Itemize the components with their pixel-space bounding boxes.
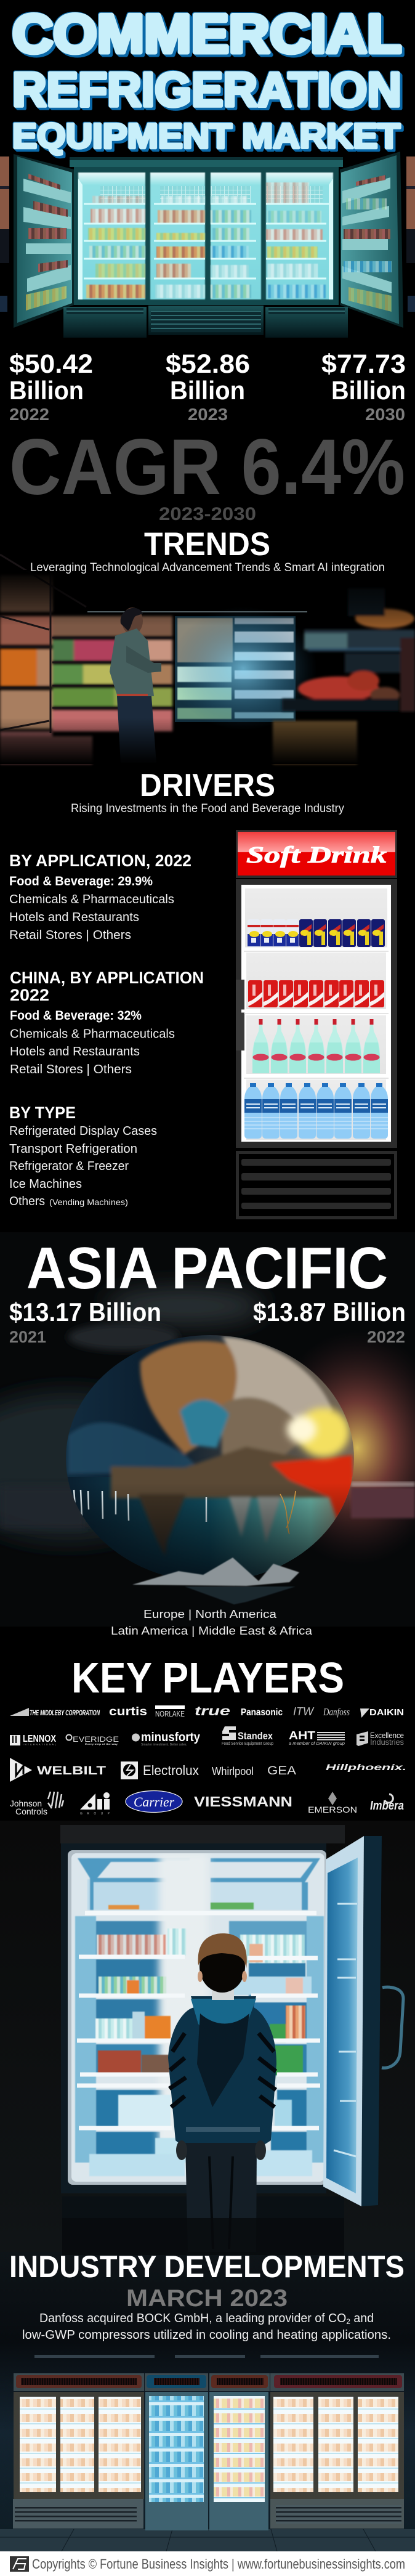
side windows [0, 156, 415, 312]
title [12, 3, 401, 156]
right shelf and produce [273, 588, 415, 764]
logo: Minusforty [132, 1731, 201, 1747]
development description [22, 2312, 391, 2342]
stat: 2030 market size: $77.73 [321, 349, 406, 379]
illustration: row of display refrigerators [0, 2218, 415, 2551]
title: EQUIPMENT MARKET [12, 116, 400, 156]
heading: drivers: DRIVERS [140, 768, 275, 803]
stat: 2030 market size: Billion [331, 376, 406, 405]
logo: AHT: a member of DAIKIN group [289, 1742, 345, 1746]
logo: Middleby: THE MIDDLEBY CORPORATION [30, 1709, 100, 1717]
bottom of fridge above [62, 2218, 344, 2255]
list: china by application 2022: Chemicals & Pharmaceuticals [10, 1028, 175, 1041]
logo: Minusforty: minusforty [141, 1731, 201, 1744]
logo: Electrolux: Electrolux [143, 1763, 199, 1778]
heading: trends: Leveraging Technological Advancement Trends & Smart AI integration [30, 561, 385, 574]
heading: key players: KEY PLAYERS [71, 1654, 344, 1702]
boy [168, 1933, 276, 2252]
right group of doors [270, 2392, 404, 2529]
logo: Carrier: Carrier [134, 1794, 174, 1810]
sky and sea backdrop [0, 1232, 415, 1627]
logo: Danfoss: Danfoss [323, 1706, 350, 1718]
illustration: globe half frozen half burning [0, 1232, 415, 1627]
stat: 2030 market size: 2030 [365, 405, 405, 424]
logo: Emerson: EMERSON [308, 1805, 357, 1814]
logo: Curtis: curtis [109, 1705, 147, 1718]
logo: GEA: GEA [267, 1765, 296, 1778]
illustration: boy looking into a refrigerator [0, 1821, 415, 2252]
logo: Imbera: Imbera [370, 1799, 404, 1813]
case cabinet [70, 157, 343, 305]
sign [236, 830, 397, 878]
back wall [87, 611, 307, 612]
stat: 2022 market size: Billion [9, 376, 84, 405]
CAGR headline: 2023-2030 [159, 504, 256, 524]
list: china by application 2022 [10, 969, 204, 1076]
row: mint bottles [252, 1019, 380, 1073]
development description: Danfoss acquired BOCK GmbH, a leading provider of CO [39, 2312, 353, 2325]
list: by type [9, 1103, 157, 1208]
middle group of doors [145, 2392, 268, 2530]
logo: Hillphoenix: Hillphoenix. [326, 1762, 406, 1772]
row: energy and lemon cans [248, 919, 385, 947]
logo: Standex: Standex [238, 1730, 273, 1742]
logo: Standex: Food Service Equipment Group [222, 1742, 273, 1746]
stat: asia pacific 2021: 2021 [9, 1328, 46, 1346]
logo: AHT [289, 1729, 345, 1746]
logo: Panasonic: Panasonic [241, 1707, 283, 1718]
list: by type: BY TYPE [9, 1103, 76, 1122]
logo: AHT: AHT [289, 1729, 315, 1742]
shelf rails [0, 555, 172, 733]
logo: Lennox: LENNOX [23, 1734, 56, 1744]
left door [14, 154, 74, 328]
list: by application 2022: Chemicals & Pharmaceuticals [9, 893, 174, 906]
stat: asia pacific 2022 [253, 1298, 406, 1346]
stat: 2022 market size: $50.42 [9, 349, 93, 379]
list: china by application 2022: 2022 [10, 986, 49, 1004]
glass panels [78, 173, 333, 299]
illustration: open refrigerated display case [0, 152, 415, 338]
footer logo [10, 2556, 29, 2572]
logo: Welbilt: WELBILT [37, 1765, 107, 1778]
logo: Ali Group [80, 1792, 110, 1816]
list: china by application 2022: Hotels and Restaurants [10, 1045, 140, 1058]
logo: Standex [222, 1726, 273, 1746]
logo: Carrier [126, 1790, 182, 1813]
logo: Excellence [357, 1731, 404, 1747]
logo: Emerson [308, 1792, 357, 1814]
bottom fade of scene [0, 718, 415, 764]
logo: Everidge [66, 1735, 119, 1745]
stat: 2022 market size [9, 349, 93, 424]
sign: Soft Drink [246, 842, 387, 868]
stat: asia pacific 2021: $13.17 Billion [9, 1298, 161, 1327]
left shelves [0, 575, 172, 764]
heading: asia pacific: ASIA PACIFIC [26, 1235, 388, 1301]
logo: Welbilt [10, 1758, 107, 1782]
refrigerator interior [71, 1853, 324, 2182]
stat: asia pacific 2022: 2022 [367, 1328, 405, 1346]
logo: Johnson Controls: Controls [15, 1806, 47, 1816]
stat: 2022 market size: 2022 [9, 405, 49, 424]
heading: trends: TRENDS [144, 526, 270, 563]
logo: Everidge: Every step of the way [85, 1742, 118, 1745]
logo: Imbera [370, 1794, 404, 1813]
glowing fridge [169, 607, 317, 730]
left group of doors [13, 2392, 144, 2529]
list: by type: Ice Machines [9, 1177, 82, 1191]
logo: Ali Group: GROUP [80, 1812, 110, 1816]
logo: Excellence: Industries [370, 1737, 404, 1747]
logo: Viessmann: VIESSMANN [194, 1794, 292, 1810]
stat: asia pacific 2021 [9, 1298, 161, 1346]
other regions [111, 1608, 313, 1637]
logo: Excellence: Excellence [370, 1731, 404, 1740]
logo: Norlake: NORLAKE [155, 1709, 185, 1718]
company logos [10, 1704, 406, 1816]
list: by application 2022 [9, 851, 191, 942]
list: by application 2022: Food & Beverage: 29.9% [9, 874, 153, 888]
list: by type: Transport Refrigeration [9, 1142, 137, 1156]
logo: Norlake [155, 1705, 185, 1718]
logo: Daikin: DAIKIN [369, 1707, 404, 1718]
footer [0, 2551, 415, 2576]
globe sphere [66, 1335, 355, 1585]
logo: Whirlpool: Whirlpool [212, 1765, 254, 1778]
stat: 2023 market size: 2023 [188, 405, 228, 424]
illustration: shopper in a supermarket [0, 555, 415, 764]
list: by type: Refrigerator & Freezer [9, 1160, 129, 1173]
stat: asia pacific 2022: $13.87 Billion [253, 1298, 406, 1327]
logo: ITW: ITW [293, 1705, 315, 1718]
other regions: Latin America | Middle East & Africa [111, 1625, 313, 1637]
list: by application 2022: Hotels and Restaurants [9, 911, 139, 924]
heading: drivers [71, 768, 344, 815]
base vent [236, 1151, 397, 1219]
list: by application 2022: Retail Stores | Others [9, 928, 131, 942]
illustration: soft drink fridge [236, 830, 397, 1219]
cabinet [236, 879, 397, 1148]
heading: trends [30, 526, 385, 574]
heading: drivers: Rising Investments in the Food and Beverage Industry [71, 802, 344, 815]
open door [323, 1836, 403, 2206]
ceiling lamps [34, 2355, 379, 2358]
logo: Lennox: INTERNATIONAL [23, 1744, 56, 1746]
list: by type: Refrigerated Display Cases [9, 1124, 157, 1138]
logo: Electrolux [121, 1761, 199, 1779]
development description: and [350, 2312, 374, 2325]
logo: Johnson Controls: Johnson [10, 1798, 42, 1808]
date: march 2023: MARCH 2023 [126, 2285, 288, 2312]
stat: 2023 market size [166, 349, 250, 424]
row: water bottles [244, 1083, 388, 1139]
right door [340, 152, 403, 328]
logo: True: true [195, 1704, 230, 1718]
development description: 2 [346, 2317, 350, 2326]
logo: Everidge: EVERIDGE [73, 1735, 119, 1744]
shelved products [84, 182, 329, 298]
title: COMMERCIAL [12, 3, 401, 64]
iceberg [132, 1558, 299, 1604]
list: china by application 2022: CHINA, BY APPLICATION [10, 969, 204, 987]
list: china by application 2022: Retail Stores | Others [10, 1063, 132, 1076]
logo: Johnson Controls [10, 1792, 63, 1816]
list: by type: Others [9, 1195, 45, 1208]
stat: 2030 market size [321, 349, 406, 424]
development description: low-GWP compressors utilized in cooling and heating applications. [22, 2328, 391, 2342]
title: REFRIGERATION [12, 62, 401, 116]
list: by application 2022: BY APPLICATION, 2022 [9, 851, 191, 870]
stat: 2023 market size: Billion [170, 376, 245, 405]
case base grills [63, 306, 348, 338]
stat: 2023 market size: $52.86 [166, 349, 250, 379]
refrigerator body [60, 1825, 345, 2252]
logo: Lennox [10, 1734, 56, 1746]
row: red cola cans [248, 980, 384, 1007]
list: by type: (Vending Machines) [49, 1197, 128, 1207]
logo: Minusforty: Smarter investment. Better sales. [141, 1743, 187, 1747]
man with phone [110, 607, 161, 764]
list: china by application 2022: Food & Beverage: 32% [10, 1009, 142, 1023]
other regions: Europe | North America [143, 1608, 277, 1620]
signage bands [14, 2373, 404, 2391]
logo: Middleby [10, 1708, 100, 1717]
floor [0, 2529, 415, 2551]
top fade of scene [0, 570, 415, 625]
